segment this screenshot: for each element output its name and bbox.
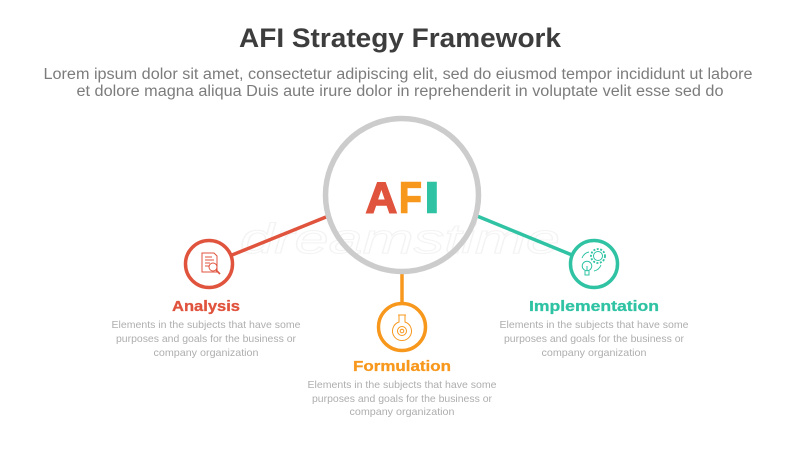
node: implementation <box>570 240 618 288</box>
text: analysis: purposes and goals for the business or <box>116 334 297 345</box>
central AFI label: A <box>366 174 397 222</box>
node: analysis <box>186 240 232 288</box>
title: AFI Strategy Framework <box>239 23 562 53</box>
icon: gear, bulb and arrows <box>582 249 605 275</box>
watermark: dreamstime <box>240 215 560 262</box>
connector: implementation <box>477 216 572 255</box>
text: implementation: Elements in the subjects that have some <box>500 320 689 331</box>
text: formulation <box>308 380 497 418</box>
heading: implementation: Implementation <box>529 298 659 315</box>
heading: analysis: Analysis <box>172 298 240 315</box>
text: implementation: company organization <box>542 348 646 359</box>
text: analysis: company organization <box>154 348 258 359</box>
central AFI label: I <box>424 173 440 222</box>
heading: formulation: Formulation <box>353 358 451 375</box>
connector: analysis <box>232 217 326 255</box>
text: analysis <box>112 320 301 359</box>
intro text <box>44 66 752 100</box>
icon: flask <box>393 315 412 341</box>
text: formulation: Elements in the subjects that have some <box>308 380 497 391</box>
connector: formulation <box>400 272 404 303</box>
central circle <box>326 118 478 272</box>
text: analysis: Elements in the subjects that have some <box>112 320 301 331</box>
text: formulation: company organization <box>350 407 454 418</box>
node: formulation <box>378 304 426 350</box>
text: formulation: purposes and goals for the business or <box>312 394 493 405</box>
central AFI label <box>366 173 440 222</box>
intro text: Lorem ipsum dolor sit amet, consectetur adipiscing elit, sed do eiusmod tempor incididunt ut labore <box>44 66 752 83</box>
icon: document with magnifier <box>202 253 220 274</box>
intro text: et dolore magna aliqua Duis aute irure dolor in reprehenderit in voluptate velit esse sed do <box>76 83 724 100</box>
text: implementation: purposes and goals for the business or <box>504 334 685 345</box>
text: implementation <box>500 320 689 359</box>
central AFI label: F <box>399 173 422 222</box>
